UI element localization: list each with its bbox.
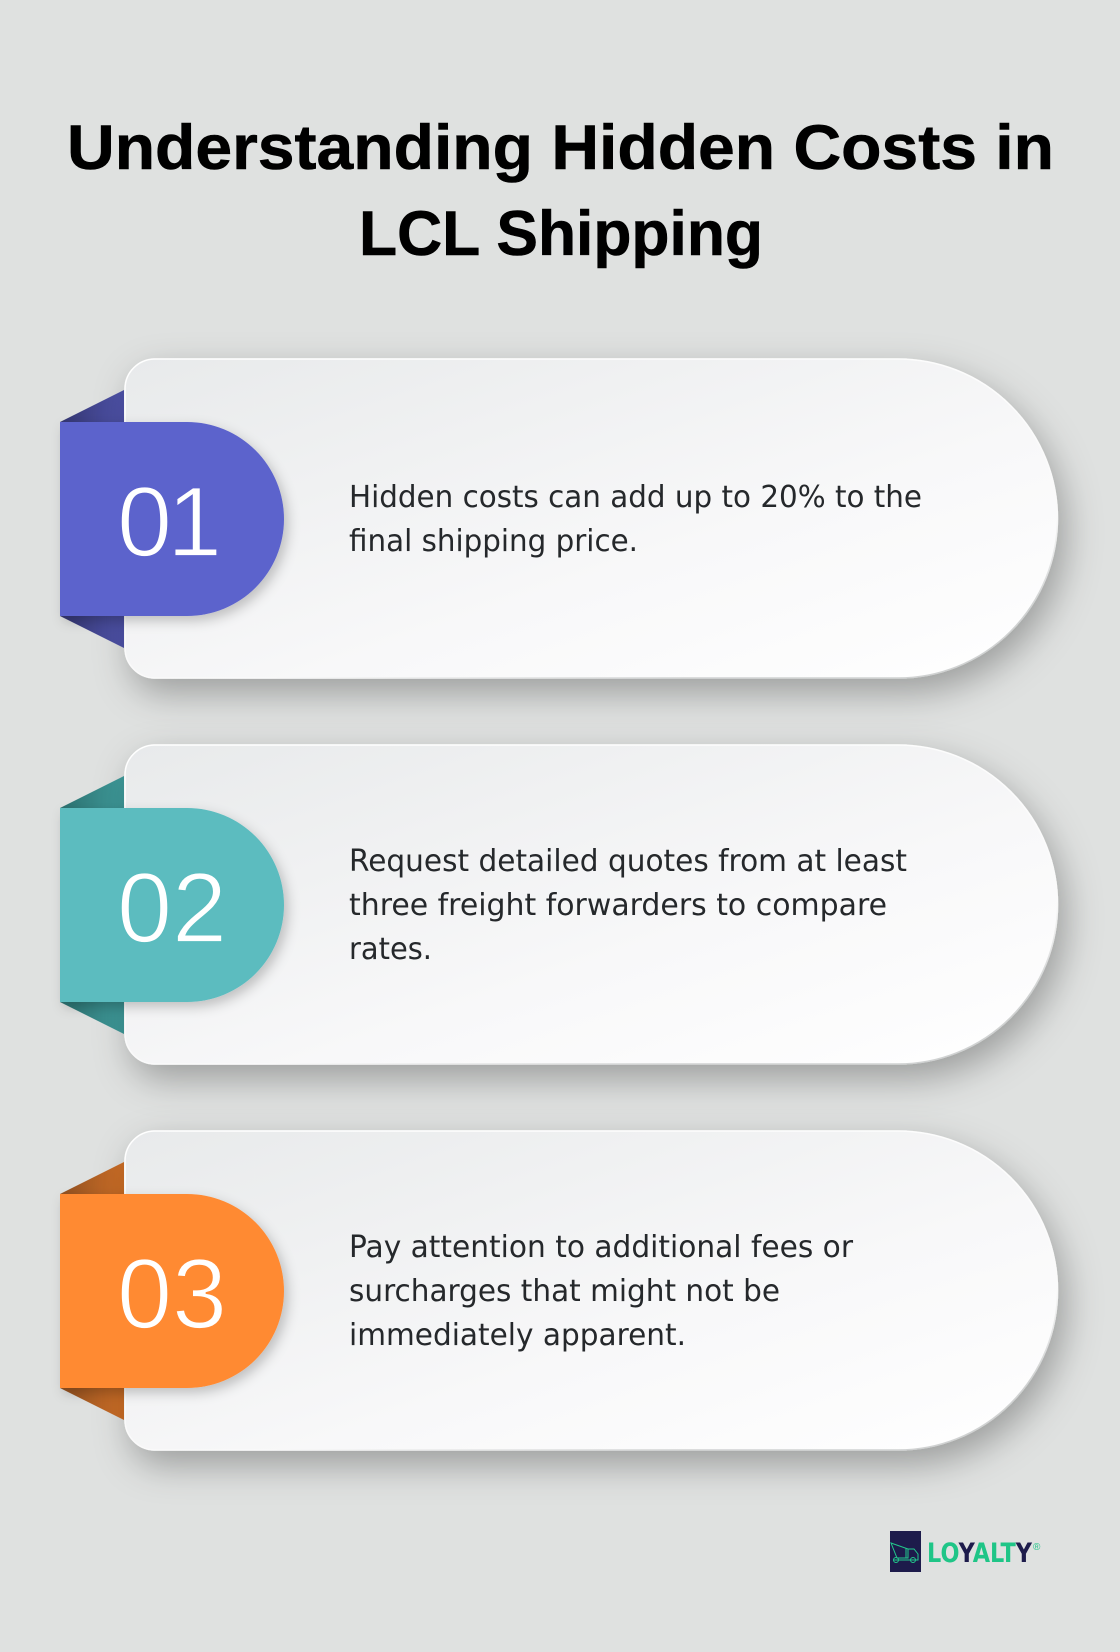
title: Understanding Hidden Costs in (67, 113, 1054, 183)
text: step 02: rates. (349, 932, 432, 967)
title (67, 113, 1054, 269)
number: 03: 03 (117, 1238, 227, 1349)
number badge: step 02 (60, 808, 284, 1002)
text: step 02: three freight forwarders to compare (349, 888, 887, 923)
title: LCL Shipping (359, 199, 763, 269)
text: step 01: Hidden costs can add up to 20% to the (349, 480, 922, 515)
card: step 02 (125, 745, 1057, 1064)
text: step 01: final shipping price. (349, 524, 638, 559)
icon: truck on navy square (890, 1531, 921, 1572)
text: step 02: Request detailed quotes from at least (349, 844, 907, 879)
text: step 02 (349, 844, 907, 967)
panel: step 01 (60, 359, 1057, 678)
panel: step 02 (60, 745, 1058, 1064)
registered mark: ® (1033, 1542, 1041, 1553)
text: step 03 (349, 1230, 854, 1353)
logo: Loyalty (890, 1531, 1041, 1572)
flaps: step 01 (60, 390, 124, 648)
number: 01: 01 (117, 466, 222, 577)
text: step 03: immediately apparent. (349, 1318, 686, 1353)
number: 02: 02 (117, 852, 227, 963)
flaps: step 03 (60, 1162, 124, 1420)
flaps: step 02 (60, 776, 124, 1034)
wordmark: LOYALTY (927, 1538, 1032, 1569)
text: step 03: surcharges that might not be (349, 1274, 780, 1309)
panel: step 03 (60, 1131, 1058, 1450)
number badge: step 01 (60, 422, 284, 616)
text: step 01 (349, 480, 922, 559)
number badge: step 03 (60, 1194, 284, 1388)
card: step 01 (125, 359, 1057, 678)
card: step 03 (125, 1131, 1057, 1450)
text: step 03: Pay attention to additional fees or (349, 1230, 854, 1265)
